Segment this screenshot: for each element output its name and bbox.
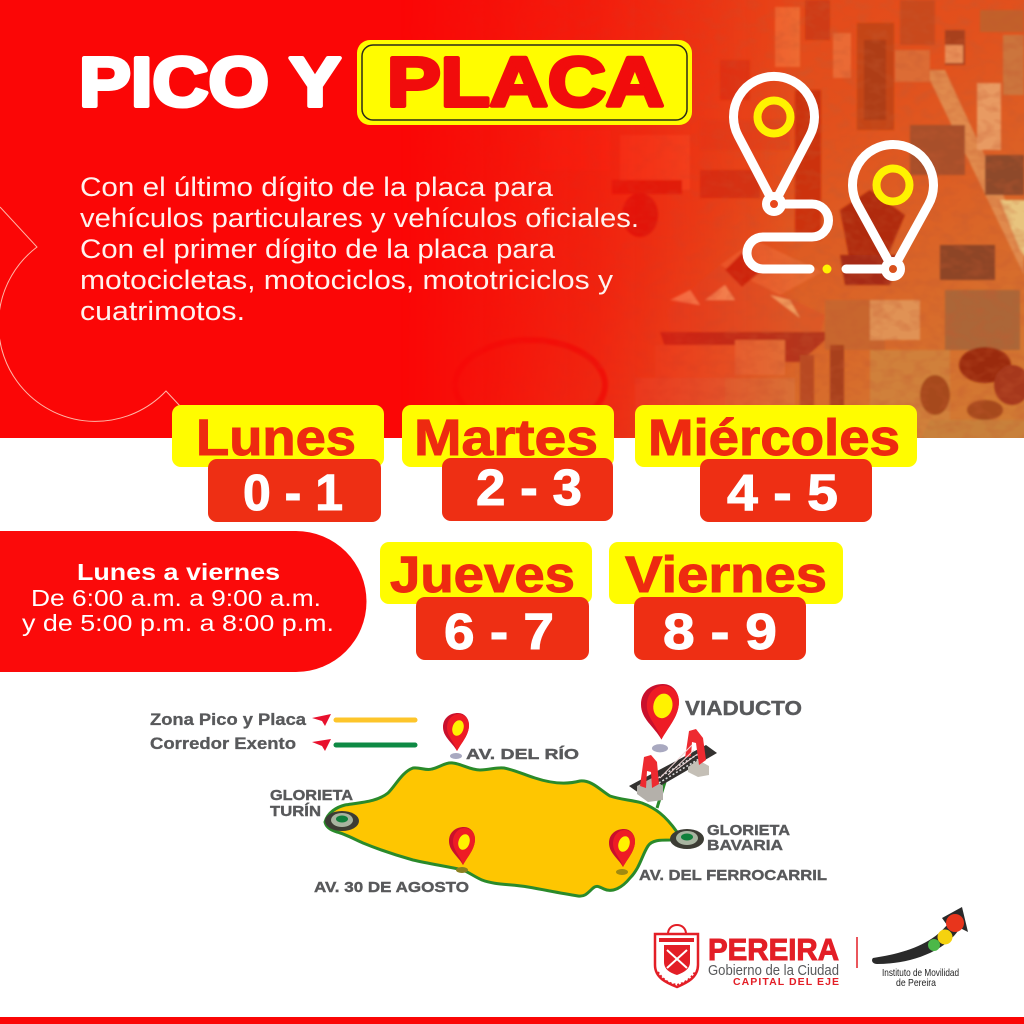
map labels — [270, 698, 827, 896]
schedule pill: y de 5:00 p.m. a 8:00 p.m. — [22, 610, 334, 636]
map labels: AV. DEL FERROCARRIL — [639, 867, 827, 884]
schedule pill: Lunes a viernes — [77, 559, 280, 585]
title — [79, 40, 692, 125]
icon: route between two location pins — [734, 76, 934, 277]
legend: Corredor Exento — [150, 735, 296, 753]
day card: Miércoles: Miércoles — [648, 409, 900, 466]
intro text — [80, 172, 639, 326]
logo: Pereira government: Gobierno de la Ciudad — [708, 963, 839, 979]
photo texture — [710, 0, 1024, 432]
map labels: GLORIETA — [270, 787, 353, 804]
pin: Av. del Río — [443, 713, 469, 759]
intro text: Con el último dígito de la placa para — [80, 172, 553, 202]
logo: Instituto de Movilidad: de Pereira — [896, 977, 936, 989]
intro text: vehículos particulares y vehículos oficiales. — [80, 203, 639, 233]
legend: Zona Pico y Placa — [150, 711, 307, 729]
title badge: PLACA — [357, 40, 692, 125]
day card: Martes: 2 - 3 — [476, 459, 582, 516]
map labels: GLORIETA — [707, 822, 790, 839]
day card: Lunes — [172, 405, 384, 522]
logo: Instituto de Movilidad: Instituto de Movilidad — [882, 967, 959, 979]
zone shape — [325, 763, 687, 896]
schedule pill: De 6:00 a.m. a 9:00 a.m. — [31, 585, 321, 611]
day card: Jueves — [380, 542, 592, 660]
map of restricted zone — [325, 684, 717, 896]
intro text: motocicletas, motociclos, mototriciclos y — [80, 265, 614, 295]
bottom red bar — [0, 1017, 1024, 1024]
map labels: TURÍN — [270, 803, 321, 820]
title: PICO Y: PICO Y — [79, 43, 341, 121]
day card: Jueves: Jueves — [390, 546, 575, 603]
pin: Av. del Ferrocarril — [609, 829, 635, 875]
day card: Martes — [402, 405, 614, 521]
day card: Jueves: 6 - 7 — [444, 603, 554, 660]
day card: Lunes: Lunes — [196, 409, 356, 466]
decorative thin outline — [0, 207, 180, 421]
title badge: PLACA: PLACA — [387, 43, 664, 121]
pin: Viaducto — [641, 684, 679, 752]
intro text: Con el primer dígito de la placa para — [80, 234, 555, 264]
roundabout: Glorieta Turín — [325, 811, 359, 831]
day card: Miércoles — [635, 405, 917, 522]
intro text: cuatrimotos. — [80, 296, 245, 326]
map labels: VIADUCTO — [685, 698, 802, 720]
logo: Instituto de Movilidad — [872, 907, 968, 989]
aerial city photo with red tint — [458, 0, 1024, 438]
schedule pill — [0, 531, 366, 672]
logo: Pereira government: CAPITAL DEL EJE — [733, 976, 839, 988]
day card: Lunes: 0 - 1 — [243, 464, 343, 521]
logo: Pereira government — [655, 925, 857, 988]
logo shield — [655, 925, 698, 987]
header red background — [0, 0, 1024, 438]
day card: Viernes: Viernes — [625, 546, 827, 603]
bridge: viaduct — [629, 729, 717, 802]
roundabout: Glorieta Bavaria — [670, 829, 704, 849]
map labels: AV. DEL RÍO — [466, 746, 579, 763]
map labels: BAVARIA — [707, 837, 783, 854]
legend — [150, 711, 415, 753]
day card: Miércoles: 4 - 5 — [727, 464, 838, 521]
logo: Pereira government: PEREIRA — [708, 932, 839, 967]
pin: Av. 30 de Agosto — [449, 827, 475, 873]
map labels: AV. 30 DE AGOSTO — [314, 879, 469, 896]
day card: Martes: Martes — [414, 409, 598, 466]
day card: Viernes: 8 - 9 — [663, 603, 777, 660]
day card: Viernes — [609, 542, 843, 660]
